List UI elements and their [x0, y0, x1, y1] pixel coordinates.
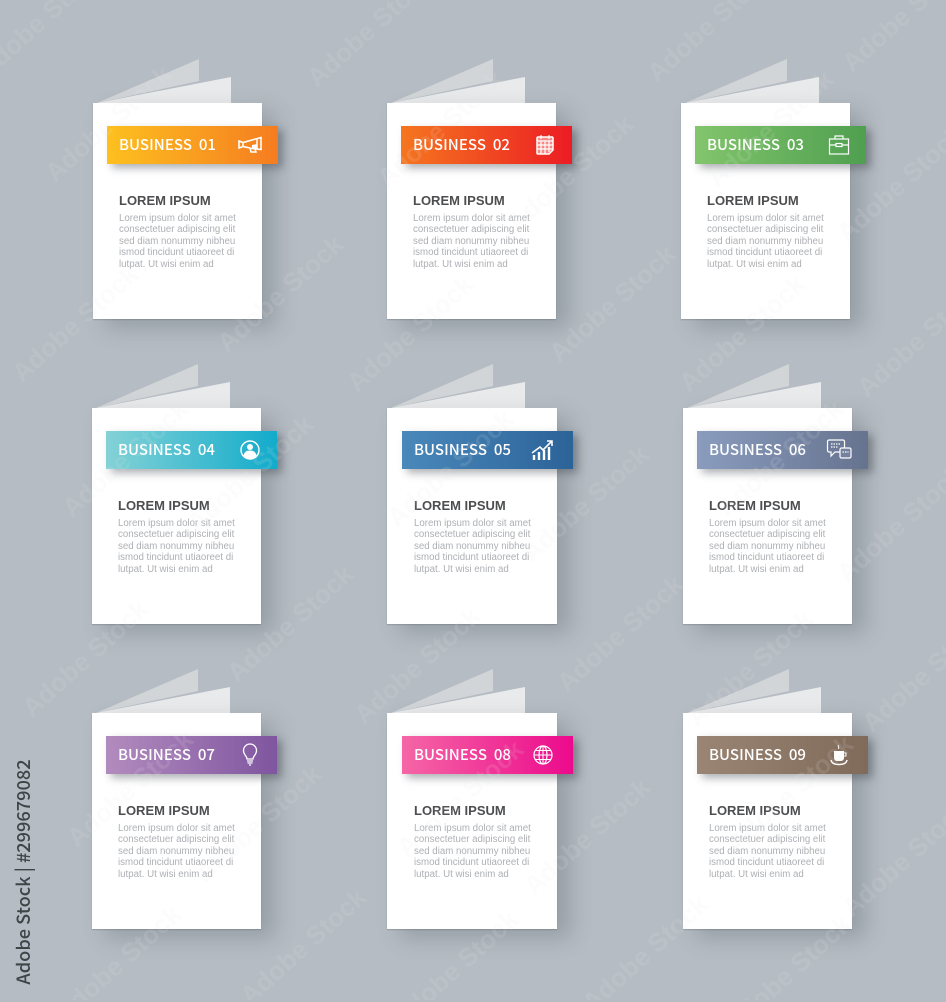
white page: [683, 408, 852, 624]
body text: lutpat. Ut wisi enim ad: [709, 869, 804, 880]
card 09: [682, 669, 879, 945]
body text: [119, 212, 236, 270]
ribbon: business 05: [402, 431, 573, 469]
watermark overlay: Adobe Stock: [681, 604, 819, 733]
body text: sed diam nonummy nibheu: [118, 541, 234, 552]
ribbon: business 06: BUSINESS 06: [709, 439, 806, 460]
watermark overlay: Adobe Stock: [381, 404, 519, 533]
body text: [118, 518, 235, 575]
body text: Lorem ipsum dolor sit amet: [414, 822, 531, 834]
card 07: [92, 669, 288, 945]
watermark overlay: Adobe Stock: [181, 409, 319, 538]
card 05: [386, 364, 584, 640]
body text: Lorem ipsum dolor sit amet: [118, 518, 235, 528]
body text: lutpat. Ut wisi enim ad: [118, 869, 213, 880]
ribbon: business 03: [695, 126, 866, 164]
folded back pages: [96, 669, 230, 713]
body text: lutpat. Ut wisi enim ad: [709, 564, 804, 575]
body text: sed diam nonummy nibheu: [414, 541, 530, 552]
body text: consectetuer adipiscing elit: [118, 529, 234, 540]
watermark overlay: Adobe Stock: [189, 759, 327, 888]
body text: ismod tincidunt utiaoreet di: [119, 247, 234, 258]
body text: Lorem ipsum dolor sit amet: [709, 822, 826, 834]
body text: consectetuer adipiscing elit: [414, 834, 530, 845]
body text: lutpat. Ut wisi enim ad: [707, 259, 802, 270]
watermark overlay: Adobe Stock: [6, 259, 144, 388]
heading: LOREM IPSUM: [707, 193, 799, 208]
watermark overlay: Adobe Stock: [711, 394, 849, 523]
folded back pages: [392, 59, 525, 103]
white page: [93, 103, 262, 319]
watermark overlay: Adobe Stock: [221, 559, 359, 688]
card 03: [680, 59, 877, 335]
watermark overlay: Adobe Stock: [371, 64, 509, 193]
white page: [683, 713, 852, 929]
body text: consectetuer adipiscing elit: [413, 224, 529, 235]
heading: LOREM IPSUM: [709, 803, 801, 818]
watermark overlay: Adobe Stock: [701, 64, 839, 193]
heading: LOREM IPSUM: [118, 498, 210, 513]
ribbon: business 09: [697, 736, 868, 774]
watermark overlay: Adobe Stock: [721, 729, 859, 858]
folded back pages: [96, 364, 230, 408]
body text: Lorem ipsum dolor sit amet: [709, 518, 826, 528]
watermark overlay: Adobe Stock: [348, 601, 486, 730]
white page: [387, 713, 557, 929]
card 01: [92, 59, 289, 335]
body text: ismod tincidunt utiaoreet di: [414, 857, 529, 868]
watermark overlay: Adobe Stock: [543, 239, 681, 368]
watermark overlay: Adobe Stock: [391, 734, 529, 863]
ribbon: business 04: [106, 431, 277, 469]
folded back pages: [688, 364, 821, 408]
body text: ismod tincidunt utiaoreet di: [118, 552, 233, 563]
body text: [413, 212, 530, 270]
watermark overlay: Adobe Stock: [39, 59, 177, 188]
heading: LOREM IPSUM: [118, 803, 210, 818]
heading: LOREM IPSUM: [119, 193, 211, 208]
folded back pages: [688, 669, 821, 713]
ribbon: business 08: BUSINESS 08: [414, 744, 511, 765]
card 02: [386, 59, 583, 335]
body text: ismod tincidunt utiaoreet di: [414, 552, 529, 563]
icon: coffee cup: [830, 744, 848, 766]
body text: consectetuer adipiscing elit: [707, 224, 823, 235]
body text: sed diam nonummy nibheu: [414, 846, 530, 857]
folded back pages: [392, 364, 525, 408]
heading: LOREM IPSUM: [709, 498, 801, 513]
body text: consectetuer adipiscing elit: [414, 529, 530, 540]
body text: ismod tincidunt utiaoreet di: [413, 247, 528, 258]
body text: sed diam nonummy nibheu: [118, 846, 234, 857]
ribbon: business 09: BUSINESS 09: [709, 744, 806, 765]
body text: sed diam nonummy nibheu: [119, 236, 235, 247]
body text: lutpat. Ut wisi enim ad: [119, 259, 214, 270]
ribbon: business 05: BUSINESS 05: [414, 439, 511, 460]
ribbon: business 08: [402, 736, 573, 774]
icon: calendar: [536, 135, 554, 155]
icon: light bulb: [242, 743, 258, 766]
watermark overlay: Adobe Stock: [341, 269, 479, 398]
body text: Lorem ipsum dolor sit amet: [413, 212, 530, 224]
card 06: [682, 364, 879, 640]
body text: sed diam nonummy nibheu: [709, 541, 825, 552]
icon: speech bubbles: [826, 439, 852, 459]
body text: [709, 822, 826, 880]
body text: [707, 212, 824, 270]
watermark overlay: Adobe Stock: [56, 394, 194, 523]
body text: consectetuer adipiscing elit: [709, 529, 825, 540]
icon: person in circle: [240, 440, 260, 460]
body text: lutpat. Ut wisi enim ad: [118, 564, 213, 575]
body text: Lorem ipsum dolor sit amet: [707, 212, 824, 224]
body text: Lorem ipsum dolor sit amet: [119, 212, 236, 224]
body text: lutpat. Ut wisi enim ad: [413, 259, 508, 270]
body text: Lorem ipsum dolor sit amet: [414, 518, 531, 528]
watermark overlay: Adobe Stock: [61, 724, 199, 853]
watermark overlay: Adobe Stock: [551, 569, 689, 698]
watermark overlay: Adobe Stock: [211, 229, 349, 358]
watermark overlay: Adobe Stock: [673, 269, 811, 398]
ribbon: business 07: [106, 736, 277, 774]
body text: sed diam nonummy nibheu: [413, 236, 529, 247]
body text: consectetuer adipiscing elit: [119, 224, 235, 235]
body text: [709, 518, 826, 575]
watermark overlay: Adobe Stock: [518, 772, 656, 901]
body text: ismod tincidunt utiaoreet di: [707, 247, 822, 258]
body text: consectetuer adipiscing elit: [709, 834, 825, 845]
icon: briefcase: [828, 135, 850, 155]
heading: LOREM IPSUM: [413, 193, 505, 208]
icon: globe: [533, 745, 553, 765]
ribbon: business 01: [107, 126, 278, 164]
heading: LOREM IPSUM: [414, 803, 506, 818]
body text: ismod tincidunt utiaoreet di: [709, 857, 824, 868]
ribbon: business 02: [401, 126, 572, 164]
body text: lutpat. Ut wisi enim ad: [414, 869, 509, 880]
folded back pages: [686, 59, 819, 103]
ribbon: business 03: BUSINESS 03: [707, 134, 804, 155]
white page: [92, 408, 261, 624]
body text: consectetuer adipiscing elit: [118, 834, 234, 845]
card 04: [92, 364, 288, 640]
watermark overlay: Adobe Stock: [16, 594, 154, 723]
ribbon: business 02: BUSINESS 02: [413, 134, 510, 155]
card 08: [386, 669, 584, 945]
white page: [387, 103, 556, 319]
ribbon: business 07: BUSINESS 07: [118, 744, 215, 765]
body text: sed diam nonummy nibheu: [709, 846, 825, 857]
body text: sed diam nonummy nibheu: [707, 236, 823, 247]
icon: growth chart: [532, 440, 553, 460]
white page: [92, 713, 261, 929]
body text: [414, 518, 531, 575]
watermark overlay: Adobe Stock: [501, 109, 639, 238]
stock image id: Adobe Stock | #299679082: [10, 759, 36, 985]
ribbon: business 01: BUSINESS 01: [119, 134, 216, 155]
folded back pages: [98, 59, 231, 103]
ribbon: business 06: [697, 431, 868, 469]
body text: ismod tincidunt utiaoreet di: [709, 552, 824, 563]
watermark overlay: Adobe Stock: [516, 439, 654, 568]
ribbon: business 04: BUSINESS 04: [118, 439, 215, 460]
folded back pages: [392, 669, 525, 713]
white page: [387, 408, 557, 624]
body text: Lorem ipsum dolor sit amet: [118, 822, 235, 834]
heading: LOREM IPSUM: [414, 498, 506, 513]
white page: [681, 103, 850, 319]
body text: [414, 822, 531, 880]
body text: lutpat. Ut wisi enim ad: [414, 564, 509, 575]
icon: megaphone: [238, 136, 262, 153]
body text: ismod tincidunt utiaoreet di: [118, 857, 233, 868]
body text: [118, 822, 235, 880]
